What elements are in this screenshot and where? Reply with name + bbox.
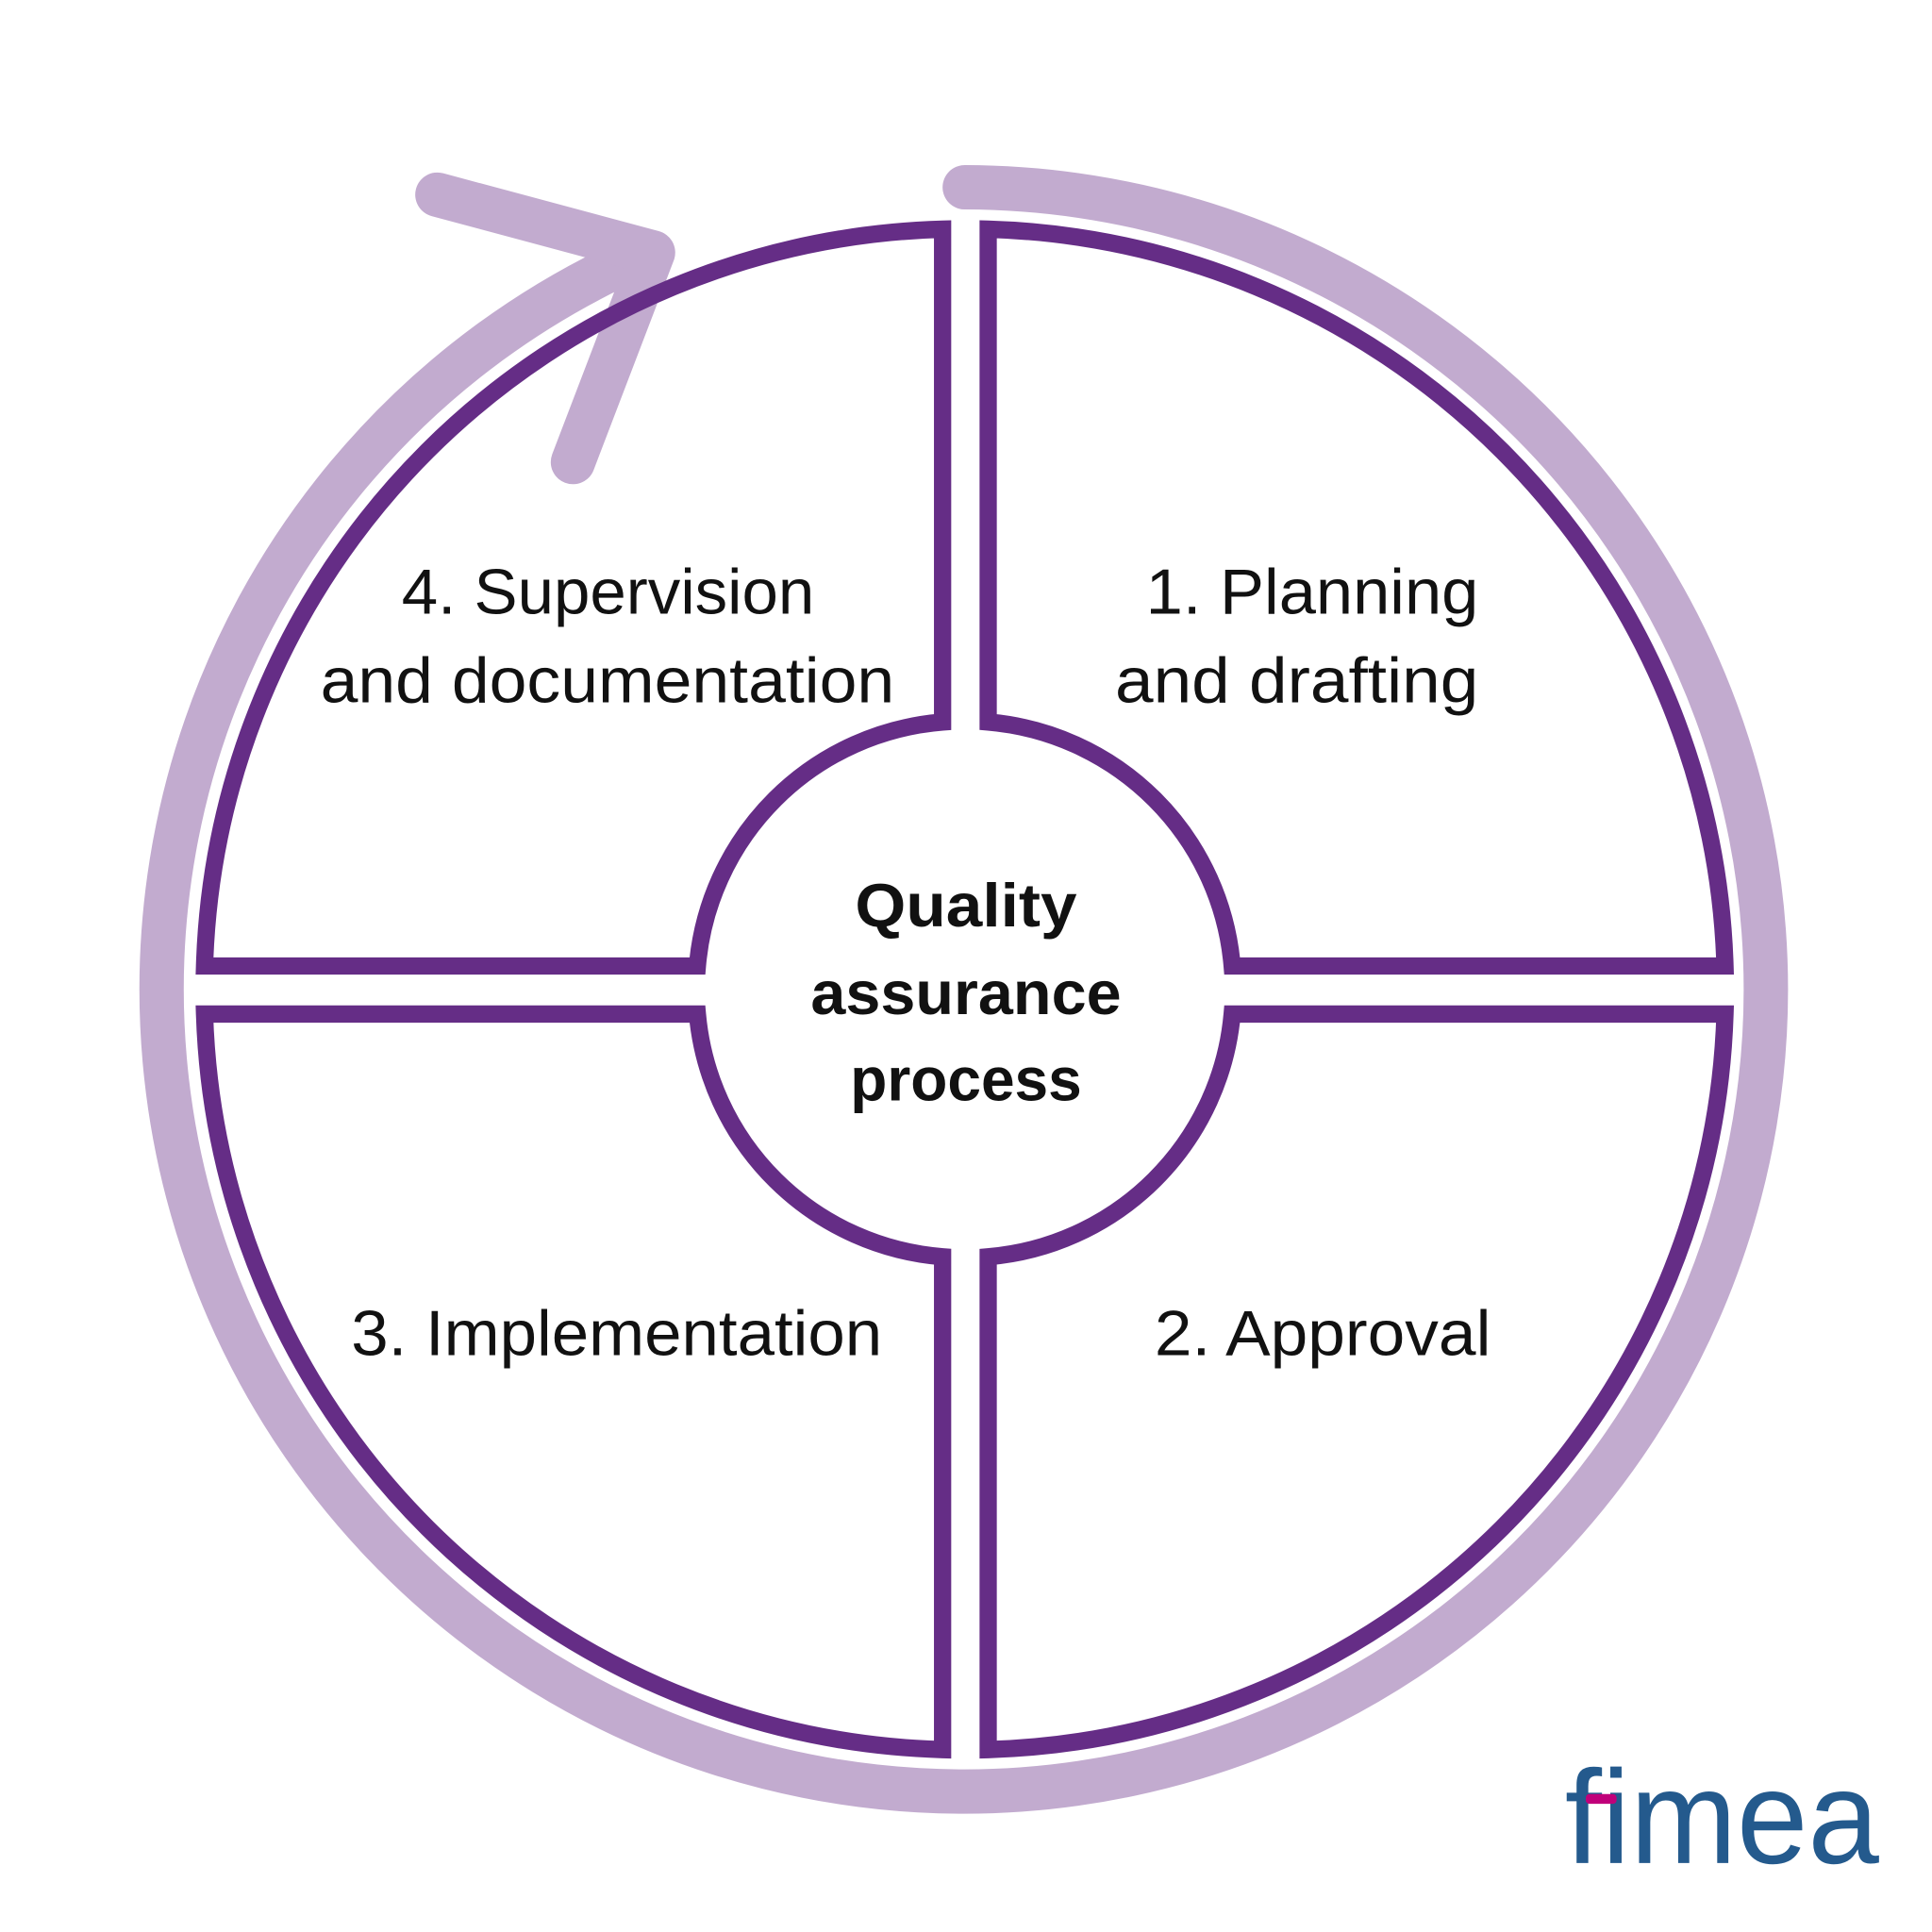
label: implementation: 3. Implementation	[351, 1299, 882, 1370]
label: planning and drafting: and drafting	[1115, 645, 1478, 716]
center title: process	[850, 1044, 1082, 1113]
cycle arrow ring	[161, 188, 1766, 1791]
label: supervision and documentation: 4. Supervision	[402, 557, 814, 627]
center title: Quality	[855, 871, 1077, 940]
logo: fimea: f	[1565, 1742, 1603, 1891]
center title: assurance	[810, 958, 1122, 1027]
logo: fimea: imea	[1602, 1742, 1879, 1891]
label: supervision and documentation: and documentation	[321, 645, 894, 716]
label: planning and drafting: 1. Planning	[1146, 557, 1478, 627]
label: supervision and documentation	[321, 557, 894, 716]
quadrant: supervision	[205, 229, 942, 966]
quadrant: planning	[989, 229, 1725, 966]
label: approval: 2. Approval	[1155, 1299, 1491, 1370]
quadrant: approval	[989, 1014, 1725, 1750]
quadrant: implementation	[205, 1014, 942, 1750]
center title	[810, 871, 1122, 1113]
arrow head	[438, 194, 653, 462]
label: planning and drafting	[1115, 557, 1478, 716]
